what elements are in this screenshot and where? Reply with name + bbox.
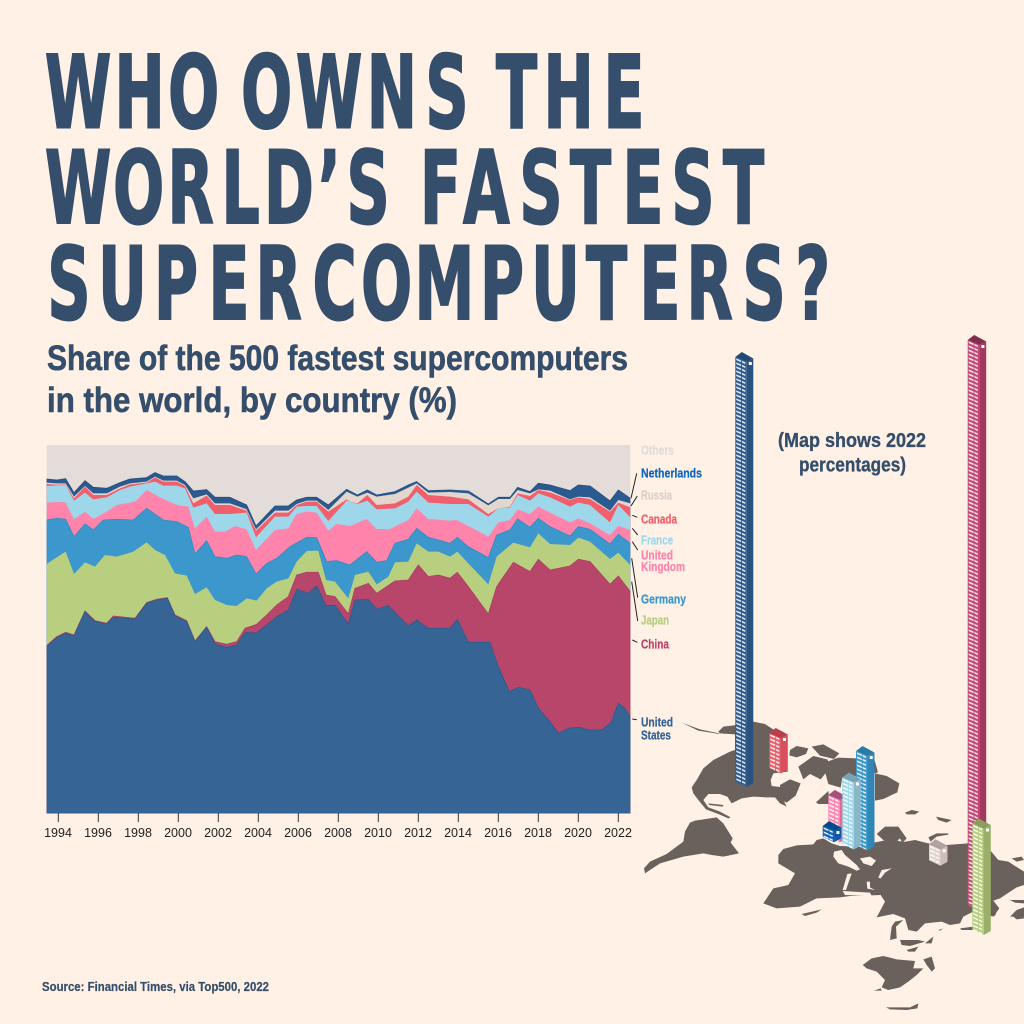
- x axis: 2004: [244, 826, 272, 840]
- bar: Canada: [769, 728, 788, 774]
- x axis: 2016: [484, 826, 512, 840]
- bar: Russia: [929, 839, 948, 866]
- title: [45, 34, 830, 343]
- chart legend labels: Canada: [641, 512, 678, 526]
- bar: China: [968, 335, 986, 910]
- chart legend labels: Japan: [641, 612, 669, 628]
- x axis: 2022: [604, 826, 632, 840]
- bar: United Kingdom: [828, 790, 847, 842]
- x axis: 2002: [204, 826, 232, 840]
- x axis: 2006: [284, 826, 312, 840]
- x axis: 2014: [444, 826, 472, 840]
- chart legend labels: Netherlands: [641, 466, 702, 480]
- x axis: [44, 813, 632, 840]
- x axis: 2010: [364, 826, 392, 840]
- chart legend labels: United: [641, 548, 673, 562]
- x axis: 1994: [44, 826, 72, 840]
- chart legend labels: China: [641, 636, 670, 652]
- source: Source: Financial Times, via Top500, 2022: [42, 980, 269, 994]
- title: WORLD’S FASTEST: [45, 130, 764, 247]
- chart legend labels: France: [641, 532, 673, 548]
- world map: [644, 722, 1024, 1010]
- chart legend labels: Russia: [641, 488, 673, 502]
- x axis: 2012: [404, 826, 432, 840]
- chart legend labels: United: [641, 714, 673, 730]
- bar: Netherlands: [823, 821, 841, 842]
- stacked area chart: [44, 445, 632, 840]
- title: SUPERCOMPUTERS?: [47, 226, 830, 343]
- bar: United States: [735, 352, 753, 787]
- chart legend labels: Others: [641, 442, 674, 458]
- subtitle: in the world, by country (%): [47, 381, 457, 420]
- inland seas: [833, 838, 902, 896]
- x axis: 1996: [84, 826, 112, 840]
- title: WHO OWNS THE: [45, 34, 645, 152]
- x axis: 2018: [524, 826, 552, 840]
- map note: percentages): [799, 454, 906, 476]
- chart legend labels: Kingdom: [641, 559, 685, 574]
- x axis: 2020: [564, 826, 592, 840]
- bar: Germany: [856, 746, 874, 850]
- chart legend labels: States: [641, 728, 671, 742]
- subtitle: [47, 339, 628, 420]
- chart legend labels: Germany: [641, 592, 687, 606]
- x axis: 2000: [164, 826, 192, 840]
- bar: Japan: [972, 818, 991, 935]
- subtitle: Share of the 500 fastest supercomputers: [47, 339, 628, 378]
- map note: [778, 430, 926, 476]
- x axis: 2008: [324, 826, 352, 840]
- map note: (Map shows 2022: [778, 430, 926, 452]
- x axis: 1998: [124, 826, 152, 840]
- bar: France: [842, 772, 861, 850]
- chart legend labels: [631, 442, 702, 742]
